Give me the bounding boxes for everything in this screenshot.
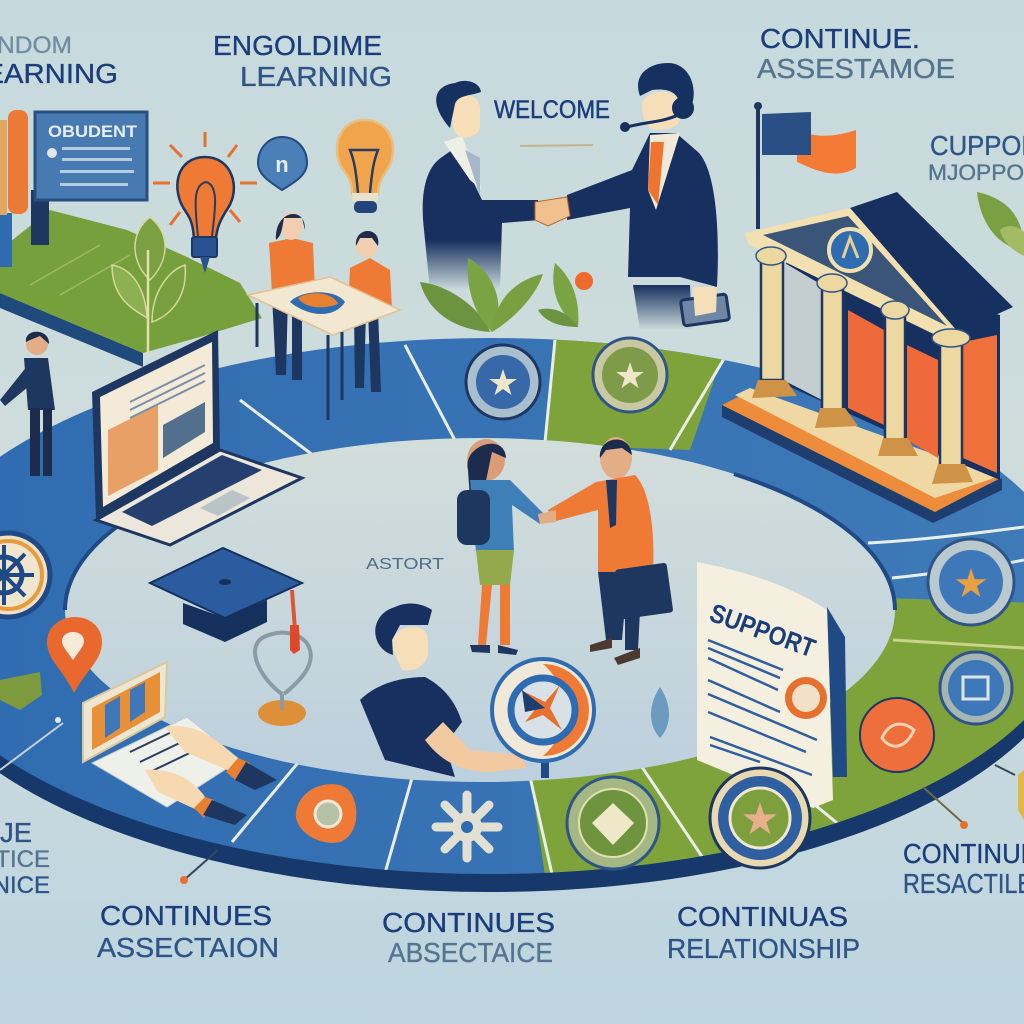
illustration: two people at table <box>248 212 400 420</box>
heading: support right <box>928 130 1024 185</box>
icon: lightbulb orange left <box>153 132 257 273</box>
icon: blue square badge right <box>940 652 1012 724</box>
icon: orange tower and student board <box>0 110 147 267</box>
icon: blue star badge right: ★ <box>953 561 989 607</box>
icon: graduation cap <box>150 548 311 726</box>
icon: orange tower and student board: OBUDENT <box>48 122 138 141</box>
heading: engolding learning: LEARNING <box>240 61 392 92</box>
panel: top-left green landscape <box>0 210 262 367</box>
icon: open laptop and hands <box>83 662 277 825</box>
icon: location pin <box>47 617 102 693</box>
illustration: support document <box>697 562 847 808</box>
illustration: seated person at target <box>360 604 527 777</box>
heading: continues assectation: ASSECTAION <box>97 932 279 963</box>
illustration: support document: SUPPORT <box>706 597 820 663</box>
arrow: pointer left <box>0 717 63 770</box>
icon: target compass <box>492 659 594 778</box>
heading: top-left learning <box>0 32 118 89</box>
heading: continuas relationship: CONTINUAS <box>677 901 848 932</box>
inner lawn of the ring <box>65 438 895 782</box>
icon: small leaf <box>651 687 669 738</box>
panel: circular journey track <box>0 338 1024 892</box>
icon: green eye badge <box>567 777 659 869</box>
icon: flag <box>754 102 856 229</box>
icon: medal star badge: ★ <box>740 794 780 845</box>
illustration: student and mentor handshake <box>457 437 673 665</box>
briefcase <box>680 287 730 326</box>
icon: medal star badge <box>710 768 810 868</box>
heading: continues absectaice: ABSECTAICE <box>388 937 553 968</box>
icon: gear <box>436 795 498 858</box>
track segments and dividers <box>230 340 1024 873</box>
heading: left lower: JE <box>0 817 32 848</box>
icon: plant left <box>112 217 185 357</box>
icon: gold item at right edge <box>995 765 1024 820</box>
person right <box>567 63 718 330</box>
heading: engolding learning <box>213 30 392 92</box>
illustration: handshake welcome <box>423 63 730 330</box>
heading: continue right lower <box>903 838 1024 899</box>
icon: ship wheel left <box>0 533 50 617</box>
icon: blue location badge <box>258 137 307 190</box>
icon: laptop <box>92 330 302 545</box>
heading: continue assessment: CONTINUE. <box>760 23 920 54</box>
heading: continuas relationship: RELATIONSHIP <box>667 933 860 964</box>
icon: blue location badge: n <box>275 152 289 177</box>
hands <box>535 197 570 226</box>
icon: right-edge plant <box>977 192 1024 256</box>
icon: stand with ring <box>255 633 311 694</box>
student <box>457 439 545 655</box>
heading: engolding learning: ENGOLDIME <box>213 30 382 61</box>
label: astort: ASTORT <box>366 556 444 573</box>
welcome text: WELCOME <box>494 96 610 124</box>
icon: track badge star 1 <box>466 345 540 419</box>
arrow: pointer lower-left <box>180 850 218 884</box>
columns <box>761 262 962 466</box>
icon: track badge star 1: ★ <box>487 363 519 404</box>
person left <box>423 81 540 290</box>
mentor <box>548 437 673 665</box>
icon: lightbulb yellow right <box>337 120 393 213</box>
icon: classical building <box>722 192 1013 523</box>
icon: blue star badge right <box>928 539 1014 625</box>
heading: continues absectaice <box>382 907 555 968</box>
icon: leaf lower-left <box>0 672 42 710</box>
illustration: presenter left <box>0 332 55 476</box>
heading: continues assectation <box>97 900 279 963</box>
heading: continuas relationship <box>667 901 860 964</box>
icon: track badge orange ring <box>296 784 356 843</box>
icon: orange leaf badge <box>860 698 934 772</box>
heading: continue assessment: ASSESTAMOE <box>757 53 955 84</box>
icon: plants centre <box>420 258 593 332</box>
heading: continue assessment <box>757 23 955 84</box>
heading: left lower <box>0 817 50 899</box>
heading: continues assectation: CONTINUES <box>100 900 272 931</box>
heading: continues absectaice: CONTINUES <box>382 907 555 938</box>
icon: track badge star 2 <box>593 338 667 412</box>
arrow: pointer lower-right <box>923 787 968 829</box>
icon: track badge star 2: ★ <box>614 356 646 397</box>
